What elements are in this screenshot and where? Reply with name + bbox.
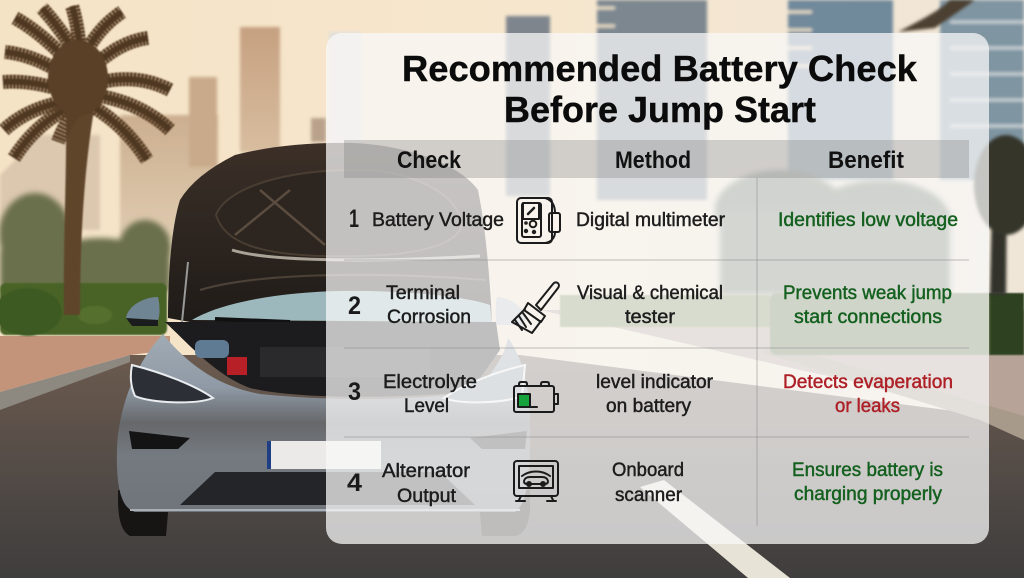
row 1: battery voltage: Identifies low voltage <box>778 210 958 231</box>
table header row: Benefit <box>828 147 904 174</box>
icon: brush <box>512 282 559 333</box>
table header row <box>344 140 969 178</box>
row 4: alternator output: scanner <box>615 485 683 506</box>
lower grille <box>180 472 475 505</box>
row 4: alternator output: charging properly <box>794 484 942 505</box>
sidewalks and road <box>0 355 1024 578</box>
row 2: terminal corrosion <box>348 282 952 333</box>
row 2: terminal corrosion: Terminal <box>386 283 460 304</box>
title: Before Jump Start <box>504 89 816 130</box>
row 4: alternator output <box>347 460 943 507</box>
engine bay <box>165 322 500 397</box>
row 3: electrolyte level: level indicator <box>596 372 714 393</box>
row 4: alternator output: 4 <box>347 469 362 497</box>
row 1: battery voltage: Battery Voltage <box>372 210 504 231</box>
license plate <box>267 441 381 469</box>
table header row: Method <box>615 147 691 174</box>
row 3: electrolyte level: Detects evaperation <box>783 372 953 393</box>
row 3: electrolyte level: Level <box>404 396 449 417</box>
row 1: battery voltage: 1 <box>349 205 359 233</box>
row 3: electrolyte level: or leaks <box>835 396 900 417</box>
row 2: terminal corrosion: Prevents weak jump <box>783 283 952 304</box>
row 4: alternator output: Output <box>397 486 457 507</box>
row 2: terminal corrosion: Corrosion <box>387 307 471 328</box>
icon: palm tree <box>3 6 170 315</box>
row 4: alternator output: Ensures battery is <box>792 460 943 481</box>
headlights <box>131 365 213 402</box>
mirrors <box>126 297 160 320</box>
wiper <box>215 319 290 322</box>
icon: right palm <box>898 0 1024 295</box>
row 3: electrolyte level <box>348 372 953 417</box>
row 1: battery voltage: Digital multimeter <box>576 210 726 231</box>
row 3: electrolyte level: 3 <box>348 378 361 406</box>
row 2: terminal corrosion: 2 <box>348 292 361 320</box>
row 3: electrolyte level: on battery <box>606 396 692 417</box>
row 2: terminal corrosion: Visual & chemical <box>577 283 723 304</box>
row 4: alternator output: Onboard <box>612 460 684 481</box>
icon: digital multimeter <box>517 198 560 243</box>
title <box>402 48 918 130</box>
fog lights <box>129 431 190 449</box>
row 2: terminal corrosion: tester <box>625 307 676 328</box>
open hood <box>168 143 492 322</box>
wheels <box>118 490 170 536</box>
icon: onboard scanner <box>514 461 558 501</box>
row 3: electrolyte level: Electrolyte <box>383 372 477 393</box>
body <box>117 334 530 512</box>
table header row: Check <box>397 147 462 174</box>
distant trees <box>0 170 950 295</box>
row 4: alternator output: Alternator <box>382 461 471 482</box>
strut <box>182 262 188 322</box>
panel: frosted table card <box>326 33 989 544</box>
car <box>117 143 530 536</box>
icon: battery level <box>514 382 558 412</box>
hedges <box>0 283 1024 355</box>
windshield <box>192 291 492 322</box>
row 2: terminal corrosion: start connections <box>794 307 942 328</box>
row 1: battery voltage <box>349 198 958 243</box>
title: Recommended Battery Check <box>402 48 918 89</box>
